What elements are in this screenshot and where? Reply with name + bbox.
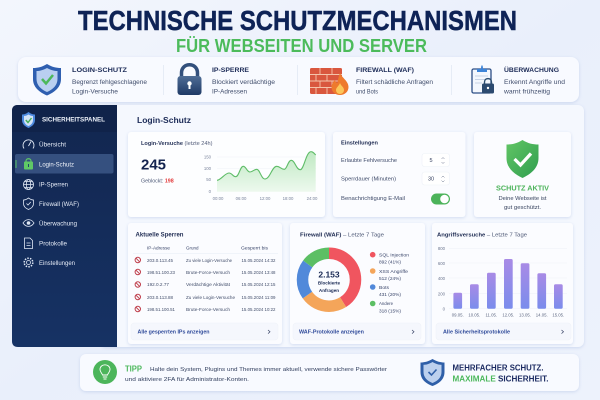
menu: IP-Sperren: IP-Sperren [39,182,68,188]
active menu highlight [15,154,114,174]
text: firewall [356,67,433,96]
table: Gesperrt bis [241,246,269,250]
panel: dashboard background [100,105,584,347]
donut center label [318,270,341,293]
bar chart: 0 [443,306,446,312]
icon: gauge [23,140,34,148]
text: monitoring: Erkennt Angriffe und [504,80,565,86]
table [133,246,278,312]
panel: attack attempts: Angriffsversuche – Letzte 7 Tage [437,232,527,238]
icon: globe [24,180,34,190]
table: 15.05.2024 10:22 [242,307,276,312]
heading: Login-Schutz: Login-Schutz [137,115,191,125]
table: Zu viele Login-Versuche [186,258,232,263]
text: login protection: Login-Versuche [72,90,119,96]
icon: green shield [506,140,538,178]
tip text: TIPP [125,364,143,374]
input: attempts: 5 [429,158,433,164]
big number: 245 [141,156,166,174]
panel: firewall: Firewall (WAF) – Letzte 7 Tage [300,232,384,238]
donut legend: 892 (41%) [379,260,401,266]
menu: Überwachung: Überwachung [39,220,77,228]
tip text [125,364,387,383]
table: 15.05.2024 11:09 [242,295,276,300]
panel: current blocks [128,223,282,344]
bar chart: 200 [438,291,446,296]
line chart: 06:00 [236,196,247,201]
icon: sidebar shield [22,112,35,128]
menu: Übersicht: Übersicht [39,142,66,148]
panel: settings: Sperrdauer (Minuten) [341,176,396,182]
text: login protection: LOGIN-SCHUTZ [72,67,127,74]
donut legend: 318 (15%) [379,308,401,314]
panel: protection active: SCHUTZ AKTIV [496,184,549,192]
line chart: 150 [204,154,212,160]
table: 198.51.100.51 [147,307,175,312]
slogan [452,364,548,384]
subtitle: FÜR WEBSEITEN UND SERVER [176,36,427,56]
donut chart [302,253,356,306]
donut center label: Anfragen [319,288,339,293]
text: IP block [212,67,276,96]
table: Brute-Force-Versuch [186,307,231,312]
panel: current blocks: Aktuelle Sperren [136,232,184,238]
panel: protection active: Deine Webseite ist [498,196,547,202]
icon: padlock [178,65,202,95]
donut legend: Bots [379,285,390,291]
panel: login attempts: Login-Versuche (letzte 24h) [141,141,213,147]
donut center label: Blockierte [318,280,341,286]
bar chart: 12.05. [502,312,514,318]
panel: firewall [290,223,425,344]
donut legend [370,252,409,314]
line chart: 0 [209,189,212,194]
panel: settings: Einstellungen [341,140,378,146]
bar chart [438,246,567,318]
icons: blocked markers [135,257,140,312]
table: 192.0.2.77 [147,282,170,287]
menu: Login-Schutz: Login-Schutz [39,162,74,168]
link: all blocked IPs [131,323,278,340]
panel: attack attempts [432,223,573,344]
donut legend: SQL Injection [379,252,409,258]
tip text: Halte dein System, Plugins und Themes immer aktuell, verwende sichere Passwörter [150,367,387,373]
bar chart: 600 [438,261,446,266]
bar chart: 09.05. [452,312,464,318]
icon: menu lock [24,159,33,170]
line chart: 00:00 [213,196,224,201]
tip text: und aktiviere 2FA für Administrator-Konten. [125,377,249,383]
text: monitoring: warnt frühzeitig [503,90,550,96]
donut legend: XSS Angriffe [379,269,408,275]
text: firewall: und Bots [356,90,378,96]
bar chart: 11.05. [485,312,497,318]
icon: clipboard with lock [472,65,494,94]
icon: footer shield [420,359,444,386]
blocked count: Geblockt: 198 [141,178,174,184]
icon: document [24,238,32,248]
icon: light bulb [93,360,117,384]
icon: menu shield [24,198,34,210]
bar chart: 15.05. [552,312,564,318]
donut legend: 512 (24%) [379,276,401,282]
text: login protection: Begrenzt fehlgeschlagene [72,80,148,86]
table: Zu viele Login-Versuche [186,295,236,300]
panel: four protection mechanisms [18,57,579,102]
menu: Einstellungen: Einstellungen [39,261,75,267]
panel: login attempts [128,132,325,217]
panel: sidebar [12,105,117,347]
table: Verdächtige Aktivität [186,282,231,287]
panel: tip band [80,354,579,391]
slogan: MAXIMALE SICHERHEIT. [452,374,548,384]
donut center label: 2.153 [318,270,340,280]
panel: protection active: gut geschützt. [504,205,541,211]
link: all security logs: Alle Sicherheitsprotokolle [443,330,510,336]
panel: settings [333,132,466,217]
line chart: 12:00 [260,196,271,201]
icon: eye [23,220,34,226]
panel: settings: Benachrichtigung E-Mail [341,196,405,202]
line chart [204,152,318,201]
text: IP block: IP-SPERRE [212,67,249,74]
slogan: MEHRFACHER SCHUTZ. [452,364,544,372]
text: IP block: IP-Adressen [212,90,247,96]
table: 15.05.2024 13:48 [242,270,276,275]
menu: Firewall: Firewall (WAF) [39,202,79,208]
link: WAF logs: WAF-Protokolle anzeigen [299,330,364,336]
text: login protection [72,67,148,96]
table: IP-Adresse [147,246,171,250]
line chart: 50 [206,177,212,182]
panel: protection active [474,132,571,217]
text: monitoring: ÜBERWACHUNG [504,65,559,74]
panel: settings: Erlaubte Fehlversuche [341,158,397,164]
table: 203.0.113.88 [147,295,173,300]
table: 15.05.2024 12:15 [242,282,276,287]
text: monitoring [503,65,565,96]
text: firewall: FIREWALL (WAF) [356,67,414,74]
text: IP block: Blockiert verdächtige [212,80,276,86]
donut legend: Andere [379,301,393,307]
bar chart: 14.05. [536,312,548,318]
line chart: 100 [204,166,212,171]
table: 203.0.113.45 [147,258,173,263]
bar chart: 800 [438,246,446,251]
input: duration: 30 [428,177,434,183]
bar chart: 10.05. [468,312,480,318]
icon: gear [24,258,33,267]
line chart: 18:00 [283,196,294,201]
toggle [431,194,450,204]
title: TECHNISCHE SCHUTZMECHANISMEN [78,5,517,36]
bar chart: 400 [438,276,446,281]
donut legend: 431 (20%) [379,292,401,298]
table: 15.05.2024 14:32 [242,258,276,263]
text: firewall: Filtert schädliche Anfragen [356,80,433,86]
link: all blocked IPs: Alle gesperrten IPs anzeigen [138,330,210,336]
table: 198.51.100.23 [147,270,175,275]
link: all security logs [436,323,571,340]
sidebar heading: SICHERHEITSPANEL [42,116,105,124]
menu: Protokolle: Protokolle [39,241,68,247]
icon: login shield [33,64,61,96]
line chart: 24:00 [307,196,318,201]
icon: brick wall with flame [310,68,348,95]
bar chart: 13.05. [519,312,531,318]
table: Brute-Force-Versuch [186,270,231,275]
table: Grund [186,246,199,250]
